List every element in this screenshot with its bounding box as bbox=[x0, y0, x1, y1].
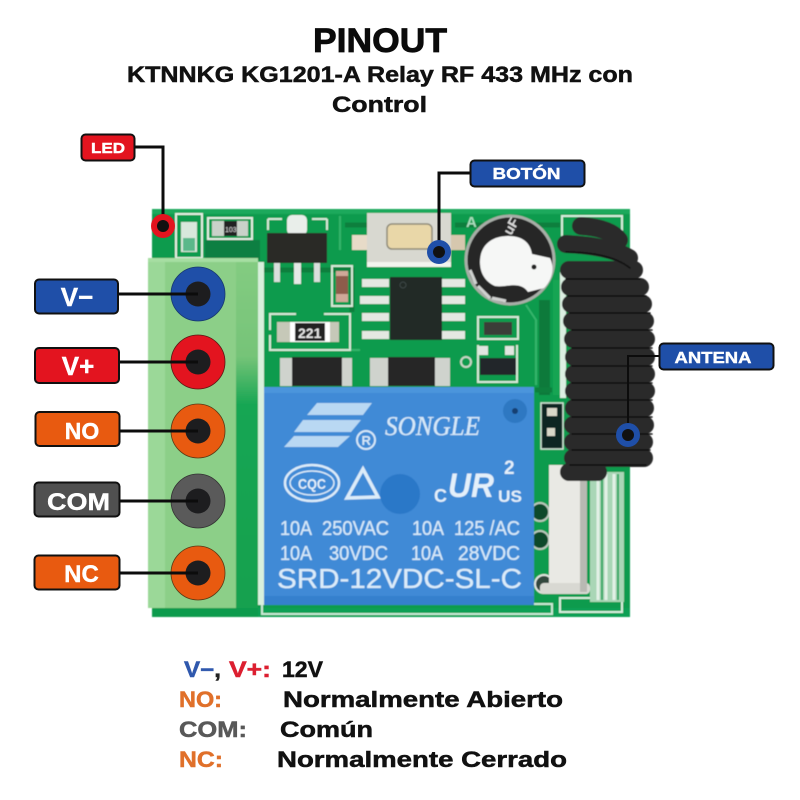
legend row: supply voltage: 12V bbox=[282, 657, 323, 682]
pin COM terminal bbox=[171, 474, 225, 528]
label: COM bbox=[34, 482, 198, 516]
relay ratings: 10A bbox=[280, 543, 313, 565]
diodes bbox=[280, 357, 450, 386]
capacitor: uF bbox=[500, 214, 522, 237]
legend bbox=[179, 657, 567, 772]
UR mark: US bbox=[498, 487, 522, 506]
panel: green PCB bbox=[152, 209, 630, 617]
label: LED: LED bbox=[91, 140, 125, 157]
round blue seal bbox=[380, 474, 420, 514]
label: V+: V+ bbox=[62, 351, 94, 381]
label: LED bbox=[82, 134, 175, 238]
legend row: NC: Normalmente Cerrado bbox=[277, 747, 567, 772]
panel: screw terminal block bbox=[148, 258, 264, 608]
label: COM: COM bbox=[47, 489, 110, 516]
brand text: SONGLE bbox=[385, 411, 480, 441]
legend row: supply voltage: V+: bbox=[229, 657, 271, 682]
RF module bbox=[540, 465, 624, 602]
legend row: NO bbox=[179, 687, 563, 712]
label: NO: NO bbox=[65, 418, 99, 444]
voltage regulator bbox=[267, 215, 327, 284]
pin NO terminal bbox=[171, 404, 225, 458]
legend row: NO: Normalmente Abierto bbox=[283, 687, 563, 712]
relay module board photo bbox=[148, 209, 652, 617]
legend row: NC: NC: bbox=[179, 747, 223, 772]
registered mark: R bbox=[362, 433, 372, 448]
label: ANTENA bbox=[616, 344, 774, 447]
label: BOTÓN: BOTÓN bbox=[492, 164, 560, 183]
UR mark bbox=[434, 458, 522, 506]
legend row: supply voltage bbox=[184, 657, 323, 682]
capacitor bbox=[466, 214, 554, 304]
relay ratings: 30VDC bbox=[329, 543, 388, 565]
pin V+ terminal bbox=[171, 335, 225, 389]
relay ratings: 10A bbox=[411, 543, 444, 565]
UR mark: 2 bbox=[504, 458, 515, 479]
label: NC bbox=[34, 556, 198, 590]
resistor 103: 103 bbox=[225, 227, 237, 234]
registered mark bbox=[357, 431, 375, 449]
icon: onboard LED bbox=[176, 214, 202, 258]
Songle logo stripes bbox=[284, 403, 372, 447]
label: V- bbox=[35, 280, 198, 314]
subtitle: KTNNKG KG1201-A Relay RF 433 MHz con bbox=[127, 62, 633, 87]
IC chip bbox=[360, 277, 465, 340]
resistor 103 bbox=[208, 218, 252, 239]
relay ratings: 250VAC bbox=[322, 518, 389, 540]
relay ratings: 10A bbox=[280, 518, 313, 540]
relay hole bbox=[503, 399, 527, 423]
legend row: NC bbox=[179, 747, 567, 772]
legend row: COM: Común bbox=[280, 717, 373, 742]
resistor vertical bbox=[332, 266, 352, 306]
resistor 221 bbox=[270, 314, 350, 350]
resistor 221: 221 bbox=[298, 325, 322, 341]
relay ratings: 125 /AC bbox=[454, 518, 520, 540]
small SMD parts bbox=[461, 317, 518, 382]
marking A: A bbox=[466, 214, 477, 231]
relay ratings: SRD-12VDC-SL-C bbox=[277, 563, 522, 594]
relay ratings: 10A bbox=[412, 518, 445, 540]
pin V- terminal bbox=[171, 267, 225, 321]
legend row: COM: COM: bbox=[179, 717, 247, 742]
relay ratings: 28VDC bbox=[458, 543, 520, 565]
jumper parts right of relay bbox=[531, 403, 563, 593]
label: NC: NC bbox=[64, 561, 99, 588]
push button bbox=[352, 213, 465, 267]
pin NC terminal bbox=[171, 546, 225, 600]
label: NO bbox=[36, 412, 198, 446]
title: PINOUT bbox=[313, 22, 447, 60]
label: V-: V− bbox=[61, 282, 93, 312]
legend row: NO: NO: bbox=[179, 687, 222, 712]
label: ANTENA: ANTENA bbox=[674, 350, 752, 367]
triangle mark bbox=[347, 469, 378, 498]
label: BOTÓN bbox=[427, 160, 584, 264]
antenna coil bbox=[566, 226, 652, 472]
relay bbox=[264, 387, 534, 605]
UR mark: C bbox=[434, 486, 447, 506]
CQC mark: CQC bbox=[298, 476, 326, 493]
label: V+ bbox=[35, 348, 198, 383]
UR mark: UR bbox=[448, 467, 494, 505]
subtitle: Control bbox=[332, 92, 427, 117]
relay ratings bbox=[277, 518, 522, 594]
legend row: COM bbox=[179, 717, 373, 742]
CQC mark bbox=[285, 465, 339, 501]
legend row: supply voltage: V−, bbox=[184, 657, 221, 682]
